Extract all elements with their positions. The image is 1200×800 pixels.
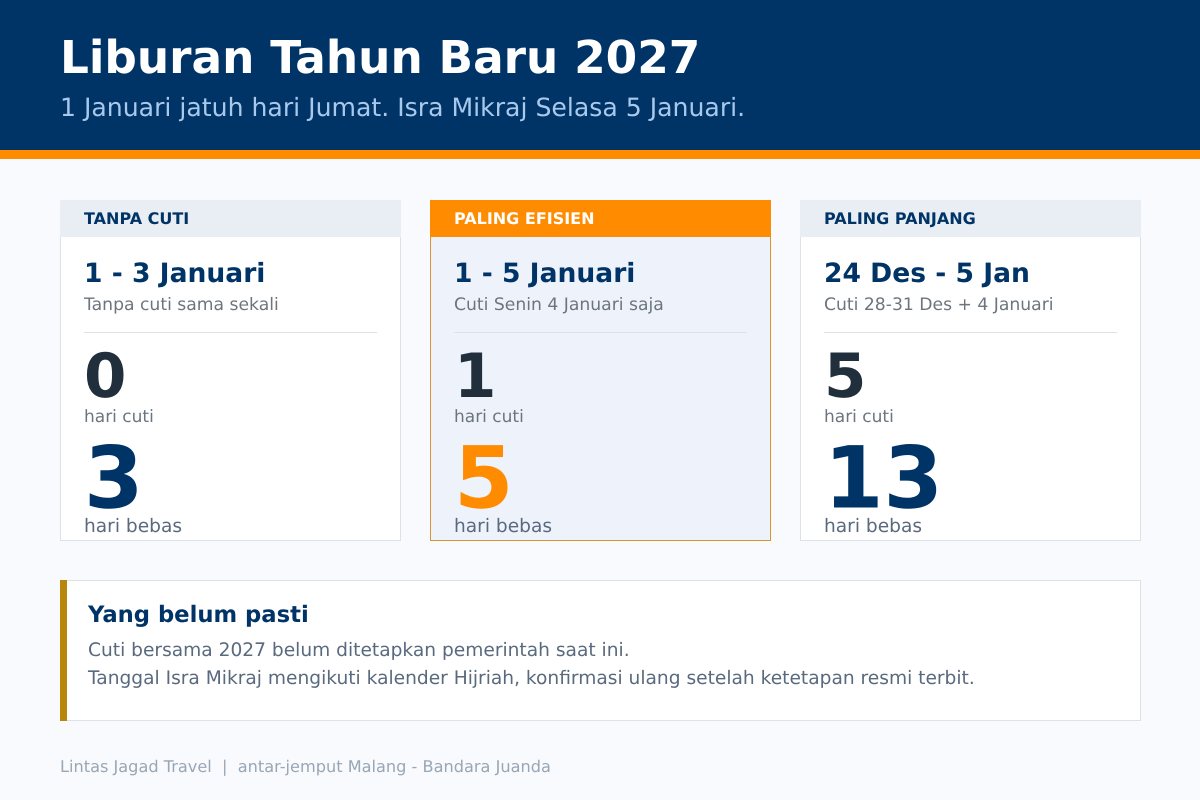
card header — [430, 200, 771, 237]
card header — [800, 200, 1141, 237]
description: Tanpa cuti sama sekali — [83, 295, 279, 315]
stat: free days: hari bebas — [454, 516, 552, 537]
stat: free days: 13 — [824, 430, 943, 528]
card header: PALING PANJANG — [824, 209, 976, 228]
stat: leave days: hari cuti — [84, 407, 154, 427]
stat: free days: 3 — [84, 430, 144, 528]
stat: leave days: hari cuti — [454, 407, 524, 427]
callout body — [87, 640, 975, 689]
header band — [0, 0, 1200, 159]
card header: TANPA CUTI — [84, 209, 189, 228]
date range: 1 - 3 Januari — [84, 258, 265, 289]
panel: paling panjang — [800, 200, 1141, 540]
stat: free days: hari bebas — [824, 516, 922, 537]
description: Cuti Senin 4 Januari saja — [454, 295, 664, 315]
stat: free days: hari bebas — [84, 516, 182, 537]
panel: tanpa cuti — [60, 200, 401, 540]
title: Liburan Tahun Baru 2027 — [60, 31, 700, 84]
card header — [60, 200, 401, 237]
panel: paling efisien — [430, 200, 771, 540]
callout body: Cuti bersama 2027 belum ditetapkan pemerintah saat ini. — [88, 640, 630, 661]
callout body: Tanggal Isra Mikraj mengikuti kalender Hijriah, konfirmasi ulang setelah ketetapan resmi terbit. — [87, 668, 975, 689]
subtitle: 1 Januari jatuh hari Jumat. Isra Mikraj Selasa 5 Januari. — [60, 93, 745, 122]
stat: leave days: 1 — [454, 341, 496, 412]
date range: 24 Des - 5 Jan — [824, 258, 1030, 289]
stat: leave days — [824, 341, 894, 427]
stat: free days: 5 — [454, 430, 514, 528]
card header: PALING EFISIEN — [454, 209, 594, 228]
stat: leave days: 0 — [84, 341, 126, 412]
stat: leave days — [454, 341, 524, 427]
date range: 1 - 5 Januari — [454, 258, 635, 289]
stat: free days — [454, 430, 552, 537]
description: Cuti 28-31 Des + 4 Januari — [824, 295, 1054, 315]
callout: yang belum pasti — [60, 580, 1140, 721]
stat: leave days: 5 — [824, 341, 866, 412]
stat: leave days: hari cuti — [824, 407, 894, 427]
footer: Lintas Jagad Travel | antar-jemput Malang - Bandara Juanda — [60, 757, 551, 776]
stat: free days — [84, 430, 182, 537]
callout heading: Yang belum pasti — [87, 602, 309, 628]
stat: leave days — [84, 341, 154, 427]
